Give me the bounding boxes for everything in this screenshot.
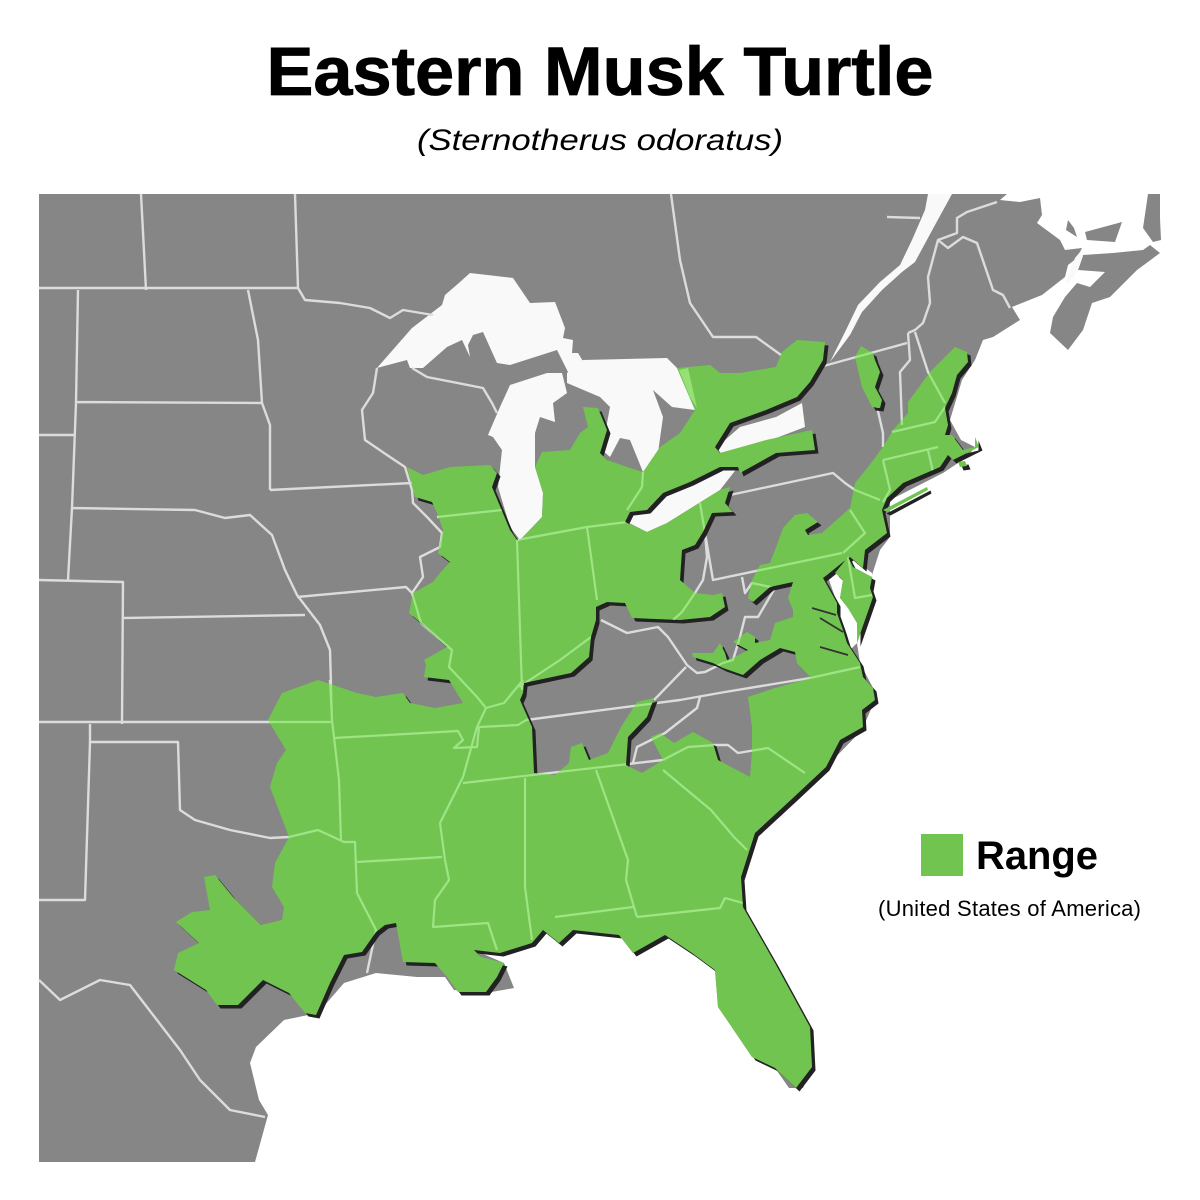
map: [39, 194, 1161, 1162]
borders inside range: [268, 352, 946, 950]
legend label: Range: [976, 834, 1098, 878]
legend swatch: [921, 834, 963, 876]
legend: [878, 834, 1141, 921]
land: gray base map: [39, 194, 1082, 1162]
lake huron: [567, 358, 695, 472]
range: lake huron shallows: [679, 368, 697, 408]
subtitle: scientific name: (Sternotherus odoratus): [417, 124, 783, 157]
land: Nova Scotia and maritime islands: [1050, 194, 1161, 350]
range shadow: [178, 344, 982, 1092]
range: green area: [174, 340, 979, 1088]
bay of fundy inlet: [1066, 252, 1083, 285]
tidal rivers: [812, 608, 848, 655]
st lawrence river: [830, 194, 952, 362]
lake michigan: [488, 373, 567, 540]
borders on gray: [39, 194, 1010, 1117]
chesapeake and delaware bays: [828, 556, 872, 650]
lake ontario: [717, 403, 805, 453]
title: Eastern Musk Turtle: [266, 33, 934, 110]
lake erie: [627, 467, 738, 532]
legend note: (United States of America): [878, 896, 1141, 921]
great lakes: [377, 194, 1083, 540]
lake superior: [377, 273, 587, 372]
